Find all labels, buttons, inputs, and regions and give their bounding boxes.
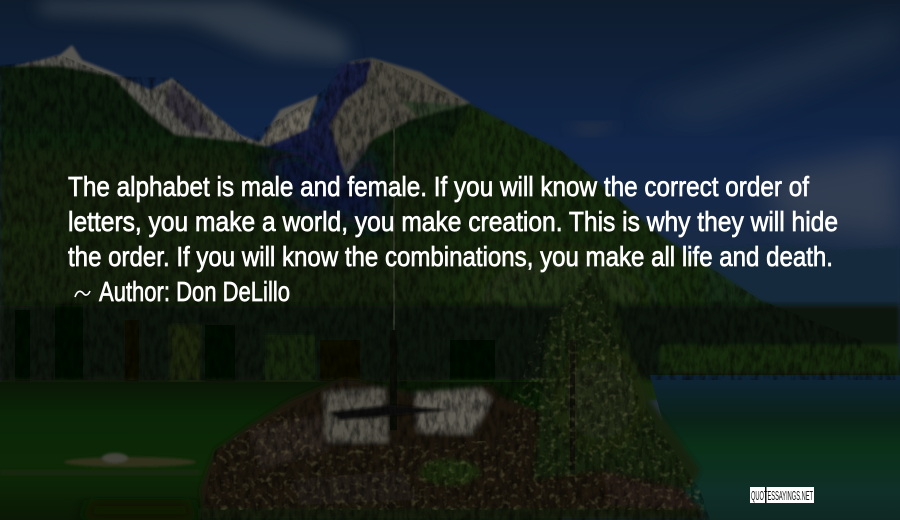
lake left	[0, 382, 560, 520]
distant hills right	[690, 245, 900, 380]
forest slopes	[0, 66, 900, 400]
author line	[75, 276, 290, 307]
quote text	[68, 171, 838, 272]
author name: Author: Don DeLillo	[99, 276, 290, 307]
lake right	[650, 375, 900, 520]
quote line 1: The alphabet is male and female. If you will know the correct order of	[68, 171, 809, 202]
pine trees	[533, 270, 700, 490]
small rocky islet	[0, 453, 200, 520]
mountains	[15, 45, 470, 190]
tilde icon	[75, 291, 90, 297]
rocky island	[200, 378, 705, 520]
tree trunks	[330, 120, 575, 470]
watermark badge	[750, 487, 814, 503]
treeline	[0, 305, 900, 380]
quote poster: QUOTESSAYINGS.NET	[751, 488, 813, 503]
